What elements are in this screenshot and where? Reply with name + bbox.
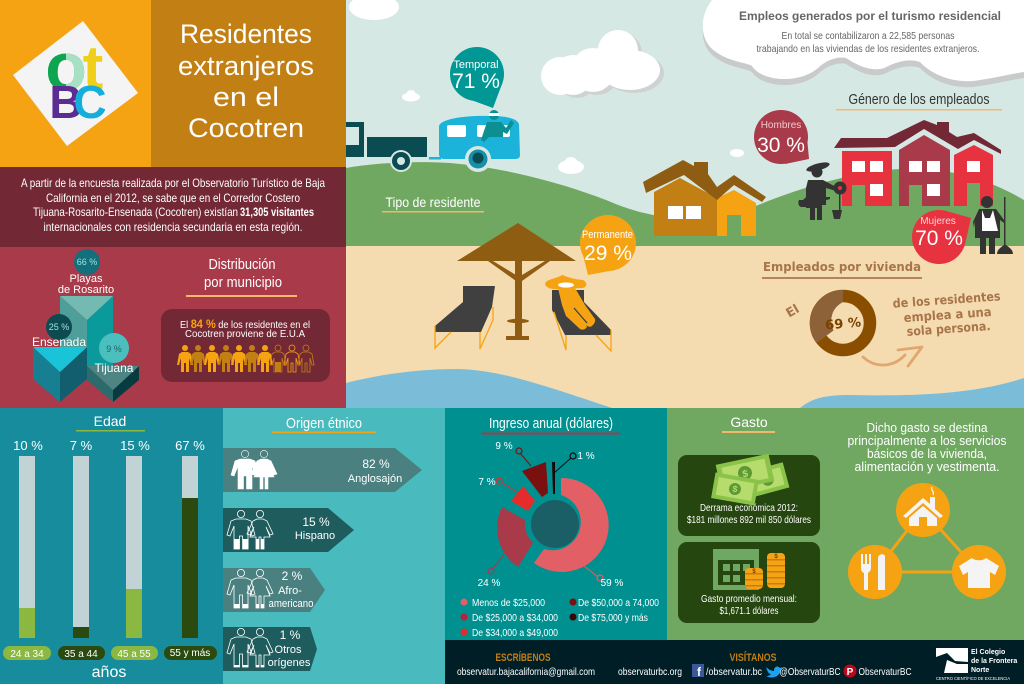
callout: 7 %	[478, 477, 517, 492]
panel: origen étnico	[223, 408, 445, 684]
label: 66 % Playas de Rosarito: Playas	[69, 273, 103, 285]
heading: tipo de residente: Tipo de residente	[386, 194, 481, 210]
label: 66 % Playas de Rosarito	[58, 249, 114, 296]
logo: OT BC: C	[73, 76, 107, 128]
heading: gasto	[722, 414, 775, 433]
icon: money: $	[741, 468, 750, 480]
cloud: employment callout: En total se contabilizaron a 22,585 personas	[782, 30, 954, 42]
contact: visítanos: ObservaturBC	[858, 666, 912, 678]
bar: 24 a 34: 10 %	[13, 438, 43, 453]
panel: ingreso anual	[445, 408, 667, 640]
text block: spending destination	[848, 420, 1007, 474]
logo: El Colegio de la Frontera Norte: de la Frontera	[971, 658, 1017, 665]
icon: maid with broom	[973, 196, 1013, 254]
text block: spending destination: básicos de la vivienda,	[867, 446, 987, 461]
icon: t-shirt	[952, 545, 1006, 599]
logo: OT BC: B	[49, 76, 83, 128]
label: 25 % Ensenada	[32, 314, 86, 349]
bubble: mujeres 70 %: 70 %	[915, 227, 963, 250]
contact: escríbenos: observatur.bajacalifornia@gmail.com	[457, 666, 595, 678]
text block: spending destination: principalmente a los servicios	[848, 433, 1007, 448]
heading: edad: Edad	[94, 413, 126, 429]
arrow: 82 % Anglosajón: 82 %	[362, 457, 390, 471]
cloud: small	[402, 90, 420, 102]
icon: coins: $	[774, 554, 778, 560]
cloud: top left	[349, 0, 399, 20]
arrow: 82 % Anglosajón: Anglosajón	[348, 473, 402, 485]
contact: visítanos: observaturbc.org	[618, 666, 682, 678]
arrow: 1 % Otros orígenes: 1 %	[280, 628, 301, 642]
logo: El Colegio de la Frontera Norte: CENTRO CIENTÍFICO DE EXCELENCIA	[936, 675, 1010, 681]
label: años: años	[92, 664, 126, 681]
heading: origen étnico: Origen étnico	[286, 416, 362, 432]
bar: 24 a 34: 24 a 34	[10, 649, 44, 660]
label: 9 % Tijuana: Tijuana	[95, 361, 134, 375]
bar: 45 a 55: 15 %	[120, 438, 150, 453]
title: en el	[213, 82, 279, 112]
arrow: 1 % Otros orígenes: Otros	[275, 644, 302, 656]
bar: 55 y más: 67 %	[175, 438, 205, 453]
panel: gasto	[667, 408, 1024, 640]
callout: 1 %: 1 %	[577, 451, 595, 462]
logo: El Colegio de la Frontera Norte: Norte	[971, 667, 989, 674]
callout: 84 % from the USA	[161, 309, 330, 382]
bar: 35 a 44	[58, 438, 105, 660]
arrow: 2 % Afroamericano	[223, 568, 325, 612]
arrow: 2 % Afroamericano: americano	[268, 598, 314, 610]
heading: distribution by municipality: por municipio	[204, 274, 282, 291]
chart: income donut	[478, 441, 624, 589]
heading: distribution by municipality	[186, 256, 297, 297]
text block: one person employed: sola persona.	[906, 318, 991, 339]
contact: visítanos: VISÍTANOS	[730, 651, 776, 664]
callout: 24 %	[478, 555, 504, 589]
text: El: El	[783, 301, 802, 320]
text block: introduction: A partir de la encuesta realizada por el Observatorio Turístico de Baja	[21, 176, 325, 190]
callout: 59 %	[584, 566, 624, 589]
icon: fork and knife	[848, 545, 902, 599]
icon: red houses	[834, 120, 1001, 206]
bubble: permanente 29 %: 29 %	[584, 242, 632, 265]
bar: 45 a 55: 45 a 55	[117, 649, 151, 660]
icon: money: $	[732, 484, 738, 494]
cloud: small lower	[558, 157, 584, 174]
panel: distribution background	[0, 247, 346, 408]
cloud: employment callout	[703, 0, 1024, 87]
heading: distribution by municipality: Distribución	[208, 256, 276, 273]
arrow: 82 % Anglosajón	[223, 448, 422, 492]
contact: visítanos: /observatur.bc	[706, 666, 762, 678]
bar: 35 a 44: 7 %	[70, 438, 93, 453]
heading: gasto: Gasto	[730, 414, 768, 430]
card: gasto promedio: $1,671.1 dólares	[720, 605, 778, 617]
icon: person in caravan	[481, 110, 514, 142]
legend: income: De $34,000 a $49,000	[472, 628, 558, 639]
text block: introduction: California en el 2012, se sabe que en el Corredor Costero	[46, 191, 300, 205]
title: extranjeros	[178, 51, 314, 81]
bubble: mujeres 70 %: Mujeres	[920, 216, 956, 227]
title	[178, 19, 314, 143]
panel: logo background	[0, 0, 151, 167]
chart: donut 69 %: 69 %	[825, 315, 862, 334]
label: 9 % Tijuana	[95, 333, 134, 375]
bar: 35 a 44: 35 a 44	[64, 649, 98, 660]
legend: income: De $50,000 a 74,000	[578, 598, 659, 609]
legend: income	[460, 598, 659, 639]
panel: landscape scene	[346, 0, 1024, 408]
icon: gardener	[798, 161, 846, 220]
icon: pinterest: P	[847, 667, 854, 678]
bubble: permanente 29 %	[580, 215, 636, 275]
cloud: employment callout: Empleos generados por el turismo residencial	[739, 9, 1001, 23]
bar: 55 y más: 55 y más	[170, 648, 210, 659]
icon: lounger with sunbather	[545, 275, 611, 351]
title: Residentes	[180, 19, 312, 49]
panel: introduction background	[0, 167, 346, 247]
callout: 24 %: 24 %	[478, 578, 501, 589]
callout: 9 %	[495, 441, 531, 466]
arrow	[863, 347, 922, 366]
contact: visítanos	[618, 651, 912, 679]
heading: empleados por vivienda: Empleados por vivienda	[763, 259, 921, 274]
arrow: 15 % Hispano	[223, 508, 354, 552]
label: 9 % Tijuana: 9 %	[106, 344, 122, 354]
chart: donut 69 %	[810, 290, 870, 350]
prism: Playas de Rosarito	[60, 296, 113, 366]
legend: income: De $25,000 a $34,000	[472, 613, 558, 624]
icon: twitter	[766, 667, 782, 677]
bubble: temporal 71 %: 71 %	[452, 70, 500, 93]
title: Cocotren	[188, 113, 304, 143]
cloud: small right	[730, 149, 744, 157]
label: 66 % Playas de Rosarito: 66 %	[77, 257, 97, 267]
logo: El Colegio de la Frontera Norte: El Colegio	[971, 649, 1005, 656]
label: 25 % Ensenada: 25 %	[49, 322, 69, 332]
icon: coins: $	[752, 569, 756, 575]
panel: title background	[151, 0, 346, 167]
diagram: basic services triangle	[848, 483, 1006, 599]
icon: coins	[745, 553, 785, 589]
bubble: mujeres 70 %	[912, 210, 971, 264]
arrow: 2 % Afroamericano: 2 %	[282, 569, 303, 583]
text block: introduction: 31,305 visitantes	[240, 205, 314, 219]
card: derrama económica	[678, 454, 820, 536]
arrow: 1 % Otros orígenes: orígenes	[268, 657, 311, 669]
label: 66 % Playas de Rosarito: de Rosarito	[58, 284, 114, 296]
card: gasto promedio: Gasto promedio mensual:	[701, 593, 797, 605]
icon: facebook: f	[697, 665, 702, 679]
bubble: temporal 71 %: Temporal	[453, 59, 499, 71]
prism: Ensenada	[33, 347, 87, 402]
text block: introduction: internacionales con residencia secundaria en esta región.	[44, 220, 302, 234]
callout: 59 %: 59 %	[601, 578, 624, 589]
arrow: 15 % Hispano: Hispano	[295, 530, 335, 542]
panel: edad	[0, 408, 223, 684]
text block: one person employed: de los residentes	[892, 288, 1001, 311]
callout: 1 %	[554, 451, 595, 473]
chart: municipal prisms	[32, 249, 139, 402]
heading: edad	[76, 413, 145, 432]
arrow: 1 % Otros orígenes	[223, 627, 317, 671]
callout: 84 % from the USA: Cocotren proviene de E.U.A	[185, 329, 305, 340]
bar: 55 y más	[164, 438, 217, 660]
icon row: people	[177, 345, 314, 372]
arrow: 15 % Hispano: 15 %	[302, 515, 330, 529]
arrow: 2 % Afroamericano: Afro-	[278, 585, 302, 597]
icon: pinterest	[844, 664, 856, 678]
icon: caravan	[429, 116, 520, 172]
text block: spending destination: alimentación y vestimenta.	[854, 459, 1000, 474]
contact: escríbenos: ESCRÍBENOS	[496, 651, 550, 664]
bar: 45 a 55	[111, 438, 158, 660]
text block: introduction	[21, 176, 325, 234]
heading: ingreso anual: Ingreso anual (dólares)	[489, 415, 613, 432]
callout: 84 % from the USA: El 84 % de los residentes en el	[180, 317, 310, 331]
icon: beach umbrella	[457, 223, 576, 340]
legend: income: De $75,000 y más	[578, 613, 648, 624]
logo: OT BC: o	[45, 29, 87, 105]
icon: calendar	[713, 549, 759, 590]
contact: visítanos: @ObservaturBC	[780, 666, 841, 678]
logo: OT BC: t	[83, 34, 103, 103]
bubble: hombres 30 %: 30 %	[757, 134, 805, 157]
cloud: employment callout: trabajando en las viviendas de los residentes extranjeros.	[756, 43, 980, 55]
card: derrama económica: Derrama económica 2012:	[700, 502, 798, 514]
bubble: temporal 71 %	[450, 47, 504, 108]
contact: escríbenos	[457, 651, 595, 678]
icon: house	[896, 483, 950, 537]
card: gasto promedio	[678, 542, 820, 623]
legend: income: Menos de $25,000	[472, 598, 545, 609]
logo: El Colegio de la Frontera Norte	[936, 648, 1017, 681]
logo: OT BC: o	[45, 29, 87, 105]
icon: truck	[346, 122, 427, 172]
prism: Tijuana	[87, 366, 139, 402]
bubble: permanente 29 %: Permanente	[582, 229, 633, 241]
bar: 24 a 34	[3, 438, 51, 660]
panel: footer	[445, 640, 1024, 684]
bubble: hombres 30 %: Hombres	[761, 120, 801, 131]
cloud: large	[541, 30, 664, 98]
callout: 7 %: 7 %	[478, 477, 496, 488]
icon: facebook	[692, 664, 704, 679]
text block: one person employed: emplea a una	[903, 304, 992, 325]
heading: género de los empleados: Género de los empleados	[848, 91, 990, 108]
logo: OT BC	[13, 21, 138, 146]
label: 25 % Ensenada: Ensenada	[32, 335, 86, 349]
icon: empty lounger	[435, 286, 495, 349]
callout: 9 %: 9 %	[495, 441, 513, 452]
icon: money	[711, 454, 789, 506]
card: derrama económica: $181 millones 892 mil 850 dólares	[687, 514, 811, 526]
text block: spending destination: Dicho gasto se destina	[866, 420, 988, 435]
bubble: hombres 30 %	[754, 110, 809, 164]
text block: introduction: Tijuana-Rosarito-Ensenada (Cocotren) existían	[33, 205, 238, 219]
icon: orange house	[643, 160, 766, 236]
text block: one person employed	[892, 288, 1003, 340]
